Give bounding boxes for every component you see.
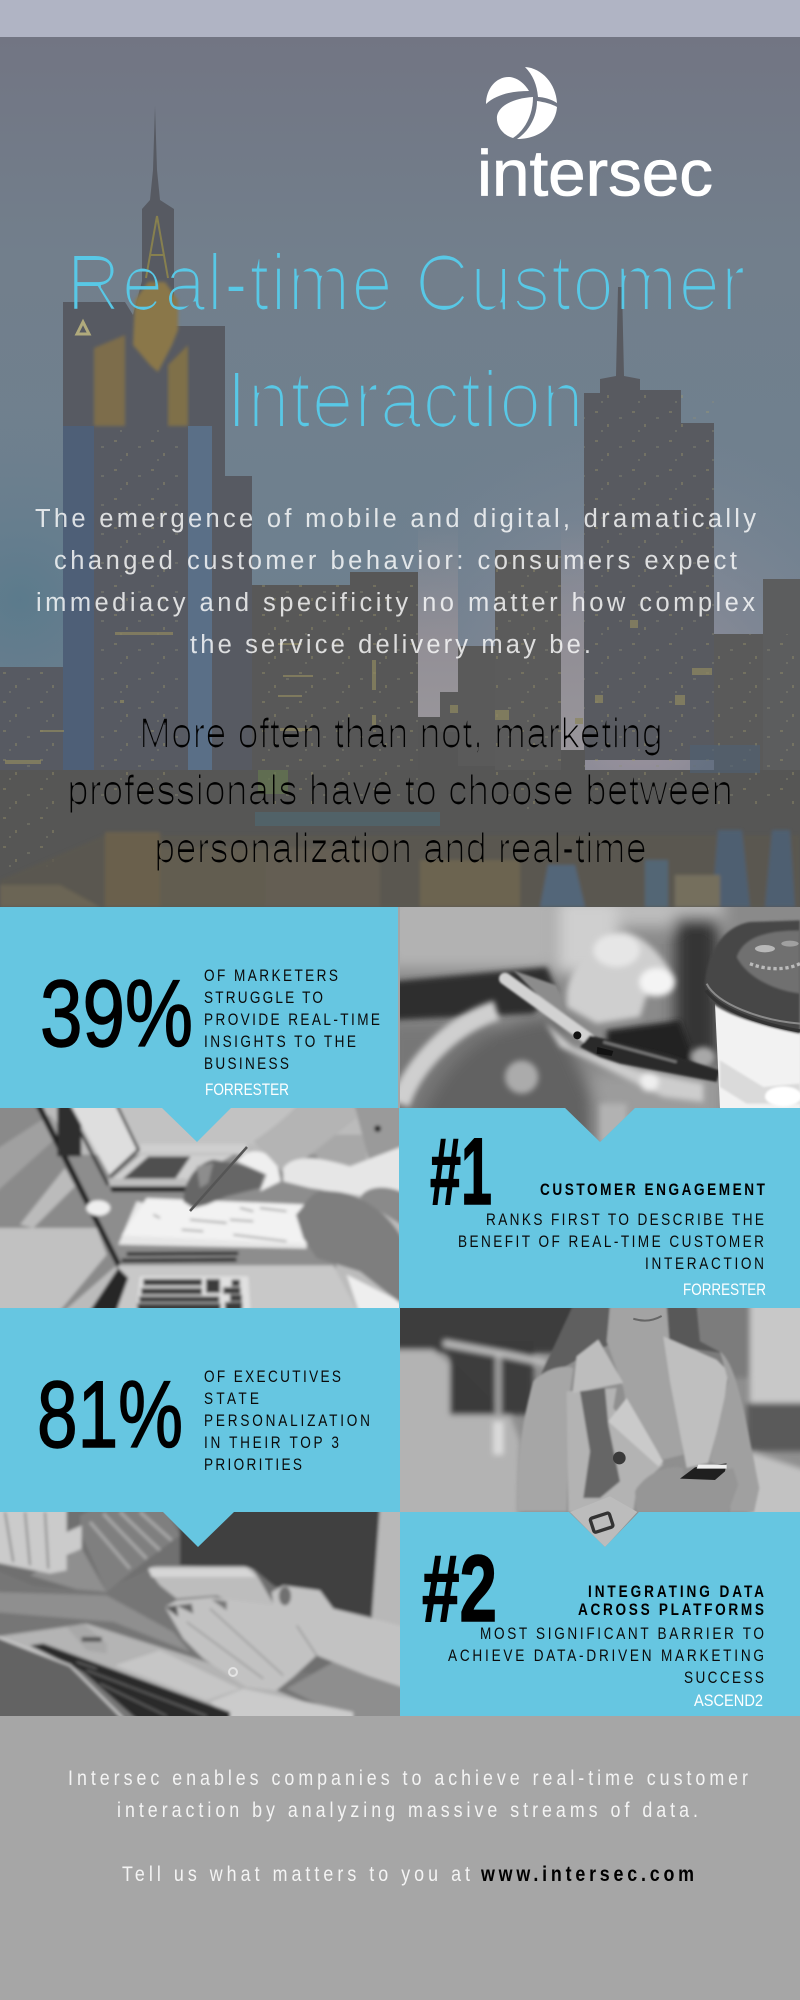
panel: #2 integrating data: [400, 1512, 800, 1716]
key statement: More often than not, marketing: [139, 710, 663, 756]
stat description: STRUGGLE TO: [204, 989, 323, 1007]
call to action: [122, 1863, 694, 1886]
stat description: INSIGHTS TO THE: [204, 1033, 356, 1051]
intro paragraph: The emergence of mobile and digital, dramatically: [35, 505, 756, 533]
stat description: [204, 967, 380, 1073]
key statement: personalization and real-time: [154, 825, 647, 871]
logo globe icon: [486, 67, 557, 139]
rank heading: [578, 1583, 764, 1619]
intro paragraph: changed customer behavior: consumers expect: [54, 547, 737, 575]
photo: hand holding smartphone over laptop: [0, 1505, 407, 1722]
stat description: PROVIDE REAL-TIME: [204, 1011, 380, 1029]
closing statement: [68, 1767, 748, 1822]
source: Forrester: FORRESTER: [683, 1280, 766, 1299]
stat description: [204, 1368, 370, 1474]
rank heading: CUSTOMER ENGAGEMENT: [540, 1181, 766, 1199]
stat description: PRIORITIES: [204, 1456, 302, 1474]
intro paragraph: [35, 505, 756, 659]
stat description: PERSONALIZATION: [204, 1412, 370, 1430]
stat description: BUSINESS: [204, 1055, 289, 1073]
city lights: [5, 620, 712, 764]
hero photo: city skyline: [0, 37, 800, 907]
photo: woman in trench coat with phone: [390, 1298, 800, 1548]
stat number 81%: 81%: [37, 1362, 183, 1468]
rank heading: ACROSS PLATFORMS: [578, 1601, 764, 1619]
rank description: ACHIEVE DATA-DRIVEN MARKETING: [448, 1647, 764, 1665]
left tower: [0, 106, 252, 800]
photo: hand holding phone with coffee cup: [400, 907, 800, 1141]
skyline blocks: [252, 585, 350, 770]
intro paragraph: the service delivery may be.: [190, 631, 591, 659]
title: Interaction: [226, 355, 584, 444]
rank description: INTERACTION: [645, 1255, 764, 1273]
logo: intersec: [477, 67, 713, 210]
panel: footer: [0, 1716, 800, 2000]
key statement: [67, 710, 733, 871]
key statement: professionals have to choose between: [67, 767, 733, 813]
rank description: BENEFIT OF REAL-TIME CUSTOMER: [458, 1233, 764, 1251]
call to action: Tell us what matters to you at: [122, 1863, 471, 1886]
source: Forrester: FORRESTER: [205, 1080, 289, 1099]
rank description: RANKS FIRST TO DESCRIBE THE: [486, 1211, 764, 1229]
call to action: www.intersec.com: [480, 1863, 694, 1886]
window lights: [0, 393, 800, 867]
rank description: [458, 1211, 764, 1273]
stat description: IN THEIR TOP 3: [204, 1434, 339, 1452]
panel: 81% stat: [0, 1308, 400, 1547]
rank description: [448, 1625, 764, 1687]
rank heading: INTEGRATING DATA: [588, 1583, 764, 1601]
rank description: SUCCESS: [684, 1669, 764, 1687]
rank number #2: #2: [422, 1536, 497, 1642]
rank description: MOST SIGNIFICANT BARRIER TO: [480, 1625, 764, 1643]
closing statement: Intersec enables companies to achieve real-time customer: [68, 1767, 748, 1790]
stat description: OF EXECUTIVES: [204, 1368, 341, 1386]
top band: [0, 0, 800, 37]
photo: hands with pen over papers and laptops: [0, 1101, 407, 1315]
title: Real-time Customer: [66, 238, 746, 327]
intro paragraph: immediacy and specificity no matter how complex: [36, 589, 755, 617]
stat description: STATE: [204, 1390, 259, 1408]
panel: 39% stat: [0, 907, 398, 1142]
panel: #1 customer engagement: [399, 1108, 800, 1308]
stat number 39%: 39%: [40, 961, 193, 1067]
rank number #1: #1: [430, 1119, 492, 1225]
source: Ascend2: ASCEND2: [694, 1691, 763, 1710]
stat description: OF MARKETERS: [204, 967, 338, 985]
logo wordmark: intersec: [477, 136, 713, 210]
title: [66, 238, 746, 444]
right tower: [584, 287, 714, 760]
closing statement: interaction by analyzing massive streams of data.: [117, 1799, 698, 1822]
